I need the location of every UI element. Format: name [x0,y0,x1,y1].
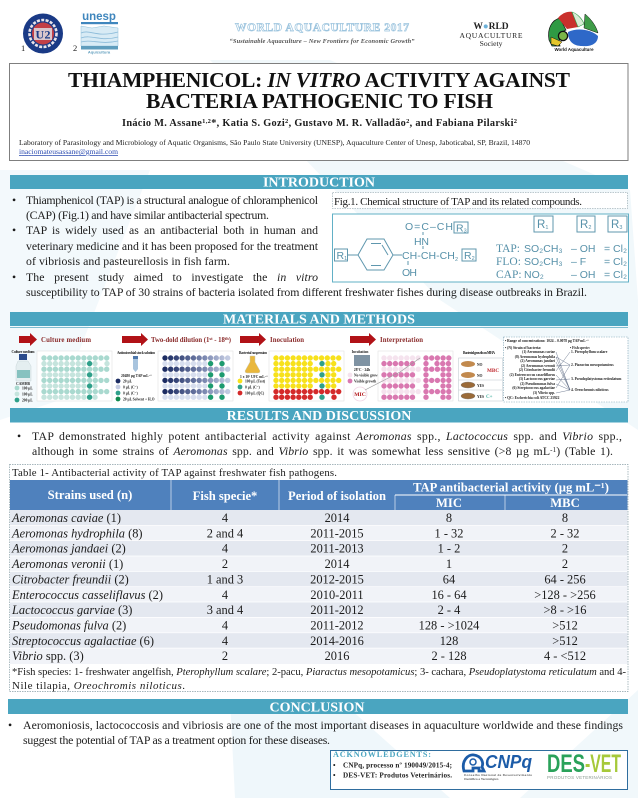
substituent table: SO₂CH₃ [524,256,563,268]
table rows: Aeromonas veronii (1) [11,557,123,571]
logo: DES-VET [547,750,621,780]
affiliation [19,138,530,156]
step 1: culture medium: 200 µL [22,398,33,402]
step 3: inoculation: 100 µL (Test) [245,380,266,384]
substituent table: TAP: [496,243,520,255]
conference heading: “Sustainable Aquaculture – New Frontiers for Economic Growth” [230,38,415,45]
table rows: 1 - 2 [438,542,460,556]
table rows: 3 and 4 [207,603,243,617]
text: results paragraph: although in some strains of Aeromonas spp. and Vibrio spp. it was somewhat less sensitive (>8 µg mL [32,444,550,458]
table rows: >512 [552,618,578,632]
table rows: 2 - 4 [438,603,460,617]
R1 substituent and benzene ring: R [336,250,344,262]
heading: introduction [10,175,628,190]
panel: table 1 [10,464,628,692]
panel: acknowledgements: DES-VET: Produtos Veterinários. [343,772,452,780]
text: introduction bullets: Thiamphenicol (TAP) is a structural analogue of chloramphenicol [26,193,319,207]
heading: conclusion: CONCLUSION [270,700,364,716]
text: introduction bullets: TAP is widely used as an antibacterial both in human and [26,223,318,237]
authors: 1,2 [202,118,211,125]
table rows: >8 - >16 [544,603,586,617]
table rows: 2014 [325,511,349,525]
affiliation: Laboratory of Parasitology and Microbiology of Aquatic Organisms, São Paulo State University (UNESP), Aquaculture Center of Unesp, Jaboticabal, SP, Brazil, 14870 [19,138,530,147]
step 2: two-fold dilution [116,333,233,402]
authors: , Gustavo M. R. Valladão [289,118,406,129]
logo: unesp aquaculture centre 2: unesp [82,11,116,23]
panel: concentrations and strains: (2) Aeromonas jandaei [520,359,555,363]
heading: results and discussion: RESULTS AND DISCUSSION [227,409,411,424]
panel: acknowledgements: • [333,772,336,780]
heading: introduction: INTRODUCTION [263,176,375,190]
substituent table: – OH [571,269,596,281]
step 4: interpretation: Interpretation [380,337,423,344]
table rows: 2012-2015 [310,572,364,586]
substituent table: 3 [619,225,622,231]
table rows: 4 [222,588,228,602]
table rows: 128 - >1024 [419,618,479,632]
table rows: Streptococcus agalactiae (6) [12,634,154,648]
logo: unesp aquaculture centre 2: 2 [73,43,77,53]
table: bacterial growth on MHA: NO [477,374,483,378]
table rows: 2010-2011 [310,588,364,602]
text: conclusion: Aeromoniosis, lactococcosis and vibriosis are one of the most important diseases in aquaculture worldwide and these findings [23,718,623,732]
panel: acknowledgements [330,750,628,790]
panel: concentrations and strains: (2) Aeromonas veronii [521,364,555,368]
table: bacterial growth on MHA [458,351,502,401]
authors: Inácio M. Assane [122,118,202,129]
title [68,68,571,113]
step 1: culture medium: 100 µL [22,386,33,390]
substituent table: NO₂ [524,269,544,281]
text: introduction bullets: of vibriosis and pasteurellosis in fish farm. [26,254,230,268]
panel: concentrations and strains: (8) Aeromonas hydrophila [515,355,555,359]
table rows [10,510,628,664]
table: bacterial growth on MHA: YES [477,395,484,399]
substituent table: – OH [571,243,596,255]
table caption: Table 1- Antibacterial activity of TAP against freshwater fish pathogens. [12,467,337,479]
figure: chemical structure [332,214,628,282]
text: introduction bullets [12,193,587,299]
substituent table: = Cl₂ [604,256,627,268]
logo: World Aquaculture Society [460,22,523,48]
step 2: two-fold dilution: th [225,336,229,341]
side chain: 2 [472,256,475,262]
caption: figure 1: Fig.1. Chemical structure of TAP and its related compounds. [334,196,582,208]
conference heading [230,22,415,45]
panel: title block [10,64,628,160]
R1 substituent and benzene ring [334,239,402,270]
panel: acknowledgements: • [333,762,336,770]
step 2: two-fold dilution: Antimicrobial stock solution [117,351,155,355]
text: introduction bullets: • [12,270,16,284]
text: results paragraph: • [17,429,21,443]
table header: Strains used (n) [48,488,132,502]
text: introduction bullets: susceptibility to TAP of 30 strains of bacteria isolated from different freshwater fishes during disease outbreaks in Brazil. [26,285,587,299]
table rows: Pseudomonas fulva (2) [11,618,126,632]
table rows: Citrobacter freundii (2) [12,572,129,586]
MIC label: MIC [354,392,366,398]
table footnote [12,667,626,692]
table: bacterial growth on MHA: C+ [486,395,493,400]
icon: incubator [354,355,370,366]
step 3: inoculation: 100 µL (QC) [245,392,265,396]
logo: university emblem 1: 1 [21,43,25,53]
table rows: Vibrio spp. (3) [12,649,84,663]
logo: World Aquaculture colourful [549,12,598,52]
panel: concentrations and strains: (3) Vibrio spp. [533,391,555,395]
table rows: 4 [222,618,228,632]
substituent table: 1 [545,225,548,231]
table rows: Aeromonas caviae (1) [11,511,121,525]
panel: concentrations and strains: 3. Pseudoplatystoma reticulatum [571,377,621,381]
table: bacterial growth on MHA: Bacterial growth on MHA [463,351,495,355]
panel: concentrations and strains: (3) Lactococcus garviae [519,377,555,381]
panel: concentrations and strains: • Range of concentrations: 1024 – 0.0078 µg TAP mL⁻¹ [505,339,589,343]
table rows: 2016 [325,649,349,663]
table rows: 2 [222,649,228,663]
panel: acknowledgements: ACKNOWLEDGENTS: [333,750,431,759]
side chain: HN [414,236,429,248]
table rows: 1 - 32 [435,526,463,540]
substituent table: = Cl₂ [604,269,627,281]
step 2: two-fold dilution: ) [229,337,231,344]
arrow: step 1 [19,333,37,346]
table rows: Lactococcus garviae (3) [11,603,132,617]
step 4: interpretation: Incubation [352,350,368,354]
logo: World Aquaculture Society: AQUACULTURE [460,31,523,40]
step 4: interpretation: 28°C - 24h [354,368,370,372]
logo: World Aquaculture colourful: World Aquaculture [554,47,594,52]
logo: CNPq [463,752,532,781]
panel: concentrations and strains: 4. Oreochromis niloticus [571,388,609,392]
arrow: step 2 [122,333,148,346]
table rows: 16 - 64 [431,588,467,602]
side chain: CH-CH-CH [402,250,455,262]
table rows: 2 [562,557,568,571]
logo: CNPq: Científico e Tecnológico [464,777,499,781]
table rows: 128 [440,634,458,648]
step 1: culture medium: Culture medium [41,337,91,344]
arrow: step 3 [240,333,266,346]
text: results paragraph [17,429,622,458]
panel: concentrations and strains: (2) Citrobacter freundii [519,368,555,372]
table rows: >128 - >256 [534,588,596,602]
step 2: two-fold dilution: - 18 [213,337,225,344]
step 2: two-fold dilution: 20 µL Solvent + H₂O [123,398,155,402]
heading: conclusion [8,699,628,716]
panel: concentrations and strains: • QC: Escherichia coli ATCC 25922 [505,396,560,400]
logo: CNPq: CNPq [485,752,532,772]
table footnote: Nile tilapia, Oreochromis niloticus. [12,680,185,692]
panel: concentrations and strains: (2) Pseudomonas fulva [520,382,555,386]
table rows: 2 [222,557,228,571]
table rows: 2 - 128 [431,649,467,663]
logo: university emblem 1 [21,14,63,54]
panel: concentrations and strains: • (N) Strain of bacteria: [505,346,541,350]
side chain: 2 [455,257,458,263]
logo: university emblem 1: U2 [36,28,50,42]
substituent table: R [611,219,619,231]
caption: figure 1 [332,192,628,208]
step 3: inoculation: Bacterial suspension [239,351,267,355]
step 2: two-fold dilution: Two-dold dilution (1 [151,337,209,344]
text: introduction bullets: veterinary medicine and it has been proposed for the treatment [26,239,319,253]
table rows: 2 - 32 [551,526,579,540]
panel: concentrations and strains: (1) Aeromonas caviae [522,350,555,354]
table rows: 2014 [325,557,349,571]
plate 1 [37,351,112,401]
table rows: 2011-2012 [310,603,364,617]
panel: concentrations and strains: • Fish specie: [570,346,590,350]
table rows: >512 [552,634,578,648]
table rows: 4 [222,542,228,556]
table rows: 1 and 3 [207,572,243,586]
table rows: 2 and 4 [207,526,243,540]
table rows: 4 [222,634,228,648]
side chain: O=C–CH [405,221,453,233]
panel: acknowledgements: CNPq, processo nº 190049/2015-4; [343,762,452,770]
logo: DES-VET: DES [547,750,585,778]
title: THIAMPHENICOL: IN VITRO ACTIVITY AGAINST [68,68,571,92]
text: conclusion: suggest the potential of TAP as a treatment option for these diseases. [23,733,330,747]
logo: unesp aquaculture centre 2: Aquicultura [88,50,111,54]
table: bacterial growth on MHA: MBC [487,368,499,374]
plate 3 [269,351,344,401]
text: results paragraph: ) (Table 1). [556,444,613,458]
authors: 2 [285,118,288,125]
text: introduction bullets: • [12,193,16,207]
table rows: 8 [562,511,568,525]
authors: 2 [406,118,409,125]
substituent table: CAP: [496,269,522,281]
logo: World Aquaculture Society: Society [480,39,503,48]
panel: concentrations and strains: 2. Piaractus mesopotamicus [571,363,614,367]
substituent table: R [537,219,545,231]
table rows: 4 - <512 [544,649,586,663]
step 1: culture medium: 100 µL [22,392,33,396]
step 3: inoculation: 1 x 10⁵ UFC mL⁻¹ [240,375,268,379]
substituent table: = Cl₂ [604,243,627,255]
side chain: OH [402,267,417,279]
text: introduction bullets: (CAP) (Fig.1) and have similar antibacterial spectrum. [26,208,269,222]
logo: DES-VET: PRODUTOS VETERINÁRIOS [547,774,612,780]
authors: 2 [514,118,517,125]
table rows: 2011-2015 [310,526,364,540]
table: bacterial growth on MHA: YES [477,384,484,388]
text: results paragraph: TAP demonstrated highly potent antibacterial activity against Aeromonas spp., Lactococcus spp. and Vibrio spp., [32,429,622,443]
table rows: 8 [446,511,452,525]
icon: stock tube [133,356,138,372]
affiliation: inaciomateusassane@gmail.com [19,147,118,156]
step 1: culture medium: CAMHB [16,382,30,386]
arrow: step 4 [350,333,376,346]
side chain: 3 [464,228,467,234]
table header: MIC [436,496,462,510]
authors: , and Fabiana Pilarski [410,118,514,129]
table: bacterial growth on MHA: NO [477,363,483,367]
substituent table: 2 [588,225,591,231]
table rows: 2011-2013 [310,542,364,556]
step 1: culture medium [12,333,112,402]
table rows: 1 [446,557,452,571]
substituent table: FLO: [496,256,521,268]
step 3: inoculation [238,333,344,401]
panel: concentrations and strains: 1. Pterophyllum scalare [571,350,608,354]
table rows: 2014-2016 [310,634,364,648]
side chain: R [464,250,472,262]
step 2: two-fold dilution: 20480 µg TAP mL⁻¹ [121,374,152,378]
substituent table [496,216,627,281]
text: introduction bullets: • [12,223,16,237]
step 4: interpretation [8,333,628,790]
logo: unesp aquaculture centre 2 [73,11,118,54]
authors: *, Katia S. Gozi [211,118,285,129]
table rows: 2011-2012 [310,618,364,632]
table header: TAP antibacterial activity (µg mL⁻¹) [413,480,609,494]
step 1: culture medium: Culture medium [12,350,34,354]
panel: concentrations and strains: (6) Streptococcus agalactiae [512,386,555,390]
step 2: two-fold dilution: 20 µL [123,380,133,384]
step 2: two-fold dilution: st [209,336,213,341]
text: results paragraph: -1 [550,446,557,454]
table header [10,480,628,510]
table footnote: *Fish species: 1- freshwater angelfish, Pterophyllum scalare; 2-pacu, Piaractus mesopotamicus; 3- cachara, Pseudoplatystoma reticulatum and 4- [12,667,626,678]
title: BACTERIA PATHOGENIC TO FISH [146,89,493,113]
logo: CNPq: Conselho Nacional de Desenvolvimento [464,773,532,777]
heading: results and discussion [10,408,628,424]
heading: materials and methods [10,312,628,328]
panel: concentrations and strains: (2) Enterococcus casseliflavus [510,373,556,377]
table rows: 64 - 256 [544,572,586,586]
substituent table: R [580,219,588,231]
text: conclusion: • [8,718,12,732]
icon: flask [245,356,260,373]
table rows: Enterococcus casseliflavus (2) [11,588,163,602]
substituent table: – F [571,256,586,268]
table rows: Aeromonas hydrophila (8) [11,526,143,540]
side chain [402,221,476,279]
plate 4 [365,351,453,401]
step 3: inoculation: 0 µL (C⁻) [245,386,261,390]
step 4: interpretation: Visible growth [354,380,376,384]
text: introduction bullets: The present study aimed to investigate the in vitro [26,270,318,284]
step 4: interpretation: No visible growth [354,374,381,378]
icon: medium bottle [16,354,31,381]
step 2: two-fold dilution: 0 µL (C⁻) [123,392,139,396]
substituent table: SO₂CH₃ [524,243,563,255]
table header: MBC [550,496,580,510]
heading: materials and methods: MATERIALS AND METHODS [223,312,415,328]
table header: Period of isolation [288,489,386,503]
MIC label [353,387,367,401]
conference heading: WORLD AQUACULTURE 2017 [235,22,409,34]
plate 2 [158,351,233,401]
table rows: 64 [443,572,455,586]
logo: World Aquaculture Society: W●RLD [473,22,509,32]
step 2: two-fold dilution: 0 µL (C⁻) [123,386,139,390]
table header: Fish specie* [193,489,257,503]
table rows: Aeromonas jandaei (2) [11,542,126,556]
text: conclusion [8,718,623,747]
panel: concentrations and strains [504,337,628,402]
R1 substituent and benzene ring: 1 [344,256,347,262]
side chain: R [456,222,464,234]
table rows: 4 [222,511,228,525]
step 3: inoculation: Inoculation [270,337,304,344]
table rows: 2 [562,542,568,556]
